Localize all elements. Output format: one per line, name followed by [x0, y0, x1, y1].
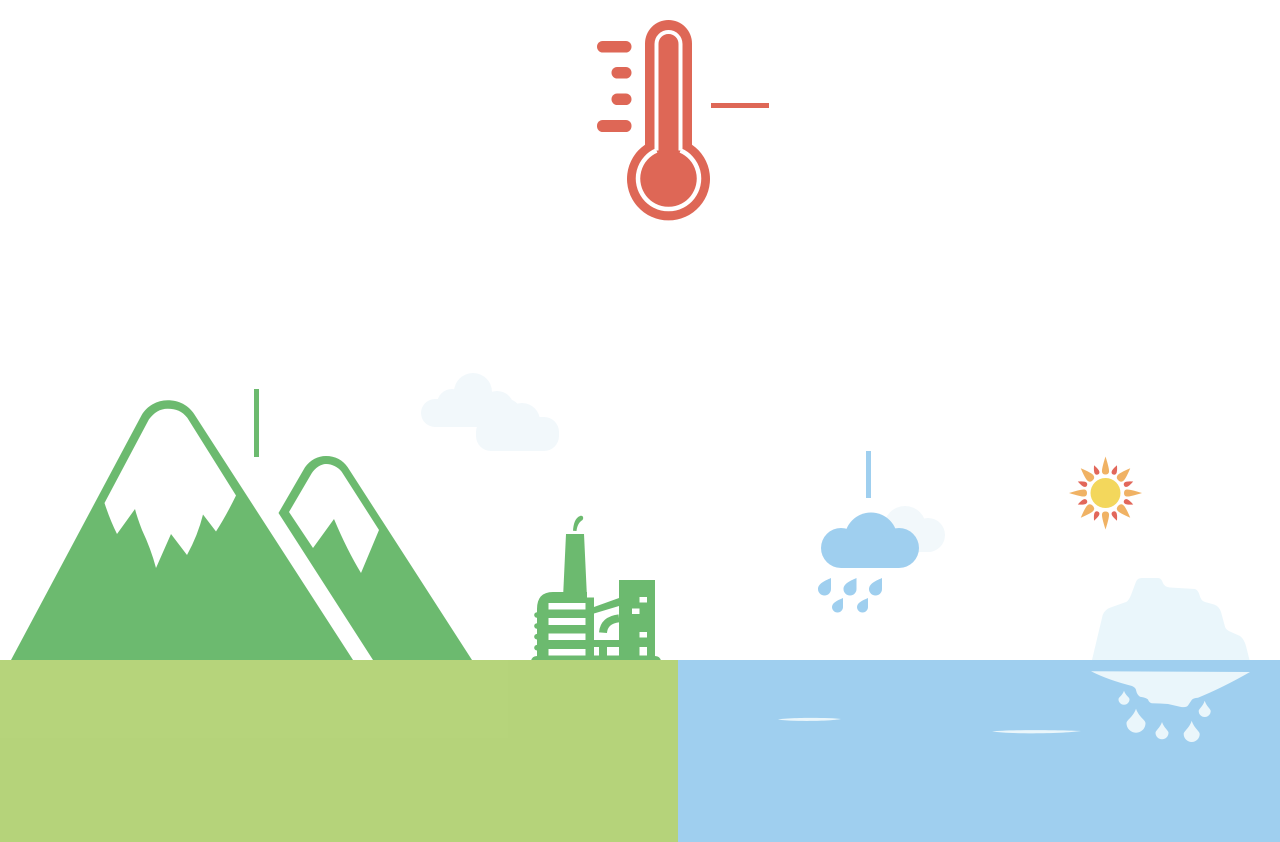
sun rays red: [1077, 464, 1134, 522]
base: [531, 656, 661, 661]
land upper patch: [0, 660, 508, 738]
tower: [619, 580, 655, 660]
iceberg below water: [1091, 671, 1250, 707]
sun disc: [1090, 478, 1120, 508]
large mountain snow cap: [104, 409, 236, 568]
raindrops: [818, 578, 831, 596]
ice sliver right: [992, 730, 1081, 733]
chimney: [563, 534, 587, 598]
small mountain: [278, 456, 472, 660]
cloud: pale behind rain cloud: [884, 506, 945, 552]
iceberg above water: [1092, 578, 1250, 660]
rain leader line: [866, 451, 871, 498]
icon: sun: [1069, 456, 1142, 530]
main building: [537, 592, 594, 660]
sun rays orange: [1069, 456, 1142, 530]
icon: mountains: [11, 400, 472, 660]
windows: [548, 597, 647, 656]
cloud: pale left: [421, 373, 559, 451]
connector: [594, 598, 619, 660]
meltwater drops: [1118, 691, 1211, 742]
chimney smoke: [573, 516, 583, 531]
mountain leader line: [254, 389, 259, 457]
icon: factory: [531, 516, 661, 661]
ice sliver left: [778, 718, 841, 721]
small mountain snow cap: [289, 464, 379, 573]
large mountain: [11, 400, 353, 660]
icon: thermometer: [597, 20, 710, 220]
temperature leader line: [711, 103, 769, 108]
land: [0, 660, 678, 842]
icon: rain cloud: [818, 512, 919, 612]
sea: [678, 660, 1280, 842]
